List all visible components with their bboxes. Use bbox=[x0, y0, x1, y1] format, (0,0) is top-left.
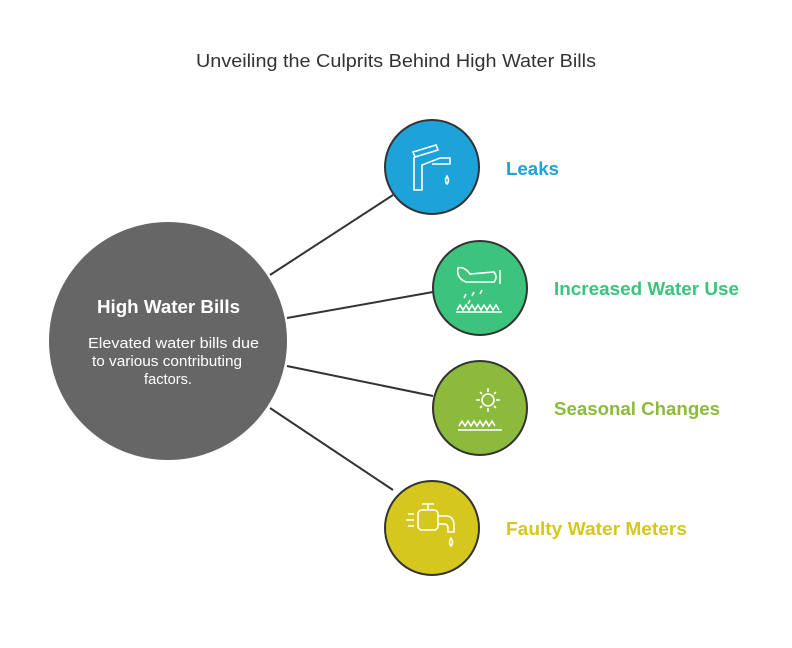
label: Increased Water Use bbox=[554, 279, 739, 299]
icon: crop duster bbox=[456, 268, 502, 312]
node: Leaks bbox=[385, 120, 559, 214]
label: Seasonal Changes bbox=[554, 399, 720, 419]
central circle: High Water Bills bbox=[49, 222, 287, 460]
connectors bbox=[270, 195, 433, 490]
central circle: High Water Bills: to various contributing bbox=[92, 353, 242, 370]
icon: sun over grass bbox=[458, 388, 502, 430]
node: Increased Water Use bbox=[433, 241, 739, 335]
icon: faucet bbox=[413, 145, 450, 190]
central circle: High Water Bills: High Water Bills bbox=[97, 297, 240, 317]
central circle: High Water Bills: factors. bbox=[144, 371, 192, 388]
title: Unveiling the Culprits Behind High Water Bills bbox=[196, 51, 596, 71]
label: Leaks bbox=[506, 159, 559, 179]
label: Faulty Water Meters bbox=[506, 519, 687, 539]
central circle: High Water Bills: Elevated water bills due bbox=[88, 335, 259, 352]
node: Faulty Water Meters bbox=[385, 481, 687, 575]
icon: tap bbox=[406, 504, 454, 546]
node: Seasonal Changes bbox=[433, 361, 720, 455]
